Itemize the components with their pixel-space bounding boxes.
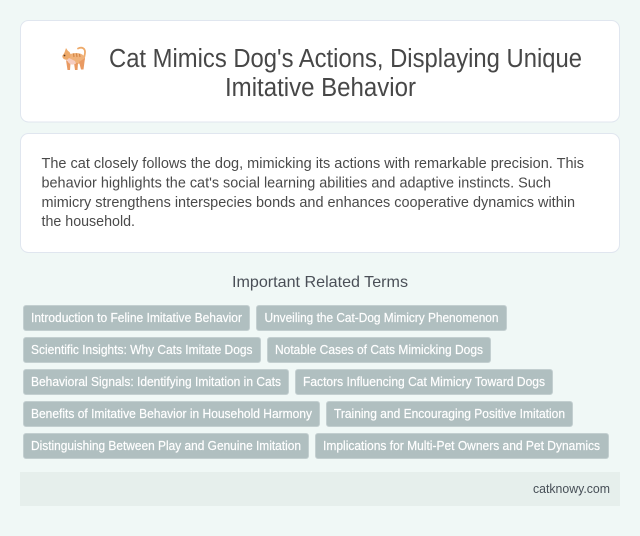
tag — [24, 434, 308, 458]
footer — [20, 472, 620, 506]
tag: Factors Influencing Cat Mimicry Toward Dogs — [303, 375, 545, 389]
title: Imitative Behavior — [225, 74, 416, 102]
tag: Introduction to Feline Imitative Behavior — [31, 311, 242, 325]
panel: description — [20, 134, 620, 252]
description text: the household. — [42, 213, 135, 230]
tag — [268, 338, 490, 362]
tag — [256, 306, 506, 330]
tag: Implications for Multi-Pet Owners and Pet Dynamics — [323, 439, 600, 453]
tag — [316, 434, 608, 458]
tag: Distinguishing Between Play and Genuine Imitation — [31, 439, 301, 453]
panel: title card — [20, 20, 620, 122]
tag: Training and Encouraging Positive Imitation — [334, 407, 565, 421]
tag: Unveiling the Cat-Dog Mimicry Phenomenon — [264, 311, 499, 325]
tag — [24, 402, 320, 426]
description text: mimicry strengthens interspecies bonds and enhances cooperative dynamics within — [42, 194, 575, 211]
tag: Behavioral Signals: Identifying Imitation in Cats — [31, 375, 281, 389]
description text: The cat closely follows the dog, mimicking its actions with remarkable precision. This — [42, 155, 584, 172]
tag list — [24, 306, 608, 458]
heading: related terms: Important Related Terms — [232, 274, 408, 291]
tag: Scientific Insights: Why Cats Imitate Dogs — [31, 343, 252, 357]
tag — [24, 306, 250, 330]
tag — [326, 402, 572, 426]
tag — [24, 338, 260, 362]
description text — [42, 155, 584, 230]
tag: Notable Cases of Cats Mimicking Dogs — [275, 343, 483, 357]
icon: cat — [62, 48, 85, 70]
title: Cat Mimics Dog's Actions, Displaying Unique — [109, 45, 582, 73]
title — [109, 45, 582, 102]
tag: Benefits of Imitative Behavior in Household Harmony — [31, 407, 313, 421]
description text: behavior highlights the cat's social learning abilities and adaptive instincts. Such — [42, 174, 551, 192]
tag — [24, 370, 288, 394]
tag — [296, 370, 552, 394]
footer source: catknowy.com — [533, 482, 610, 496]
